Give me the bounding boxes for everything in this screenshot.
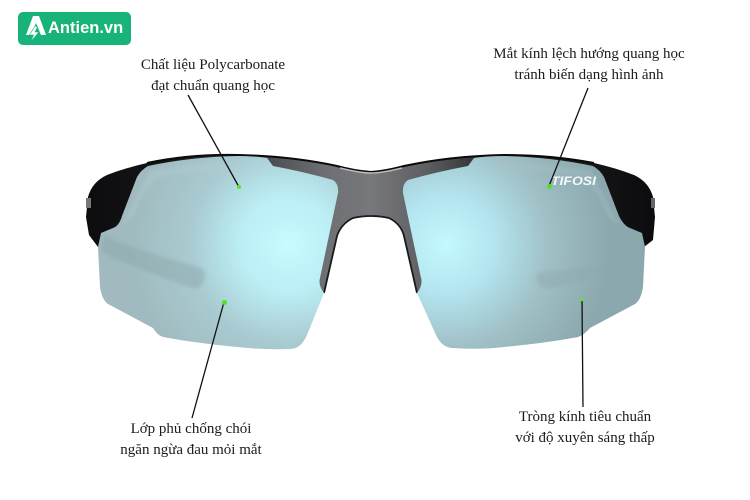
leader line: lens standard [582,300,583,407]
dot: polycarbonate [237,185,241,189]
callout: polycarbonate material: đạt chuẩn quang học [151,78,275,94]
callout: standard lens transmission: Tròng kính tiêu chuẩn [519,409,651,425]
leader line: optical decentered [549,88,588,186]
dot: lens standard [580,298,583,301]
frame [86,155,655,293]
callout: polycarbonate material: Chất liệu Polycarbonate [141,57,285,73]
callout: anti-glare coating: Lớp phủ chống chói [131,421,251,437]
callout: polycarbonate material [141,57,285,94]
logo wordmark: Antien.vn [48,19,123,37]
dot: anti-glare [222,300,227,305]
right lens [403,156,645,349]
brand mark on lens: TIFOSI [551,176,597,188]
callout: anti-glare coating: ngăn ngừa đau mỏi mắt [120,442,262,458]
icon: A with lightning [26,16,46,40]
callout: standard lens transmission: với độ xuyên sáng thấp [515,430,655,446]
dot: optical decentered [547,184,552,189]
left lens [98,156,338,349]
callout: standard lens transmission [515,409,655,446]
callout: decentered optical lens: Mắt kính lệch hướng quang học [493,46,685,62]
leader line: anti-glare [192,302,224,418]
leader line: polycarbonate [188,95,239,187]
callout: decentered optical lens [493,46,685,82]
callout: decentered optical lens: tránh biến dạng hình ảnh [514,66,664,82]
callout: anti-glare coating [120,421,262,458]
logo badge [18,12,131,45]
